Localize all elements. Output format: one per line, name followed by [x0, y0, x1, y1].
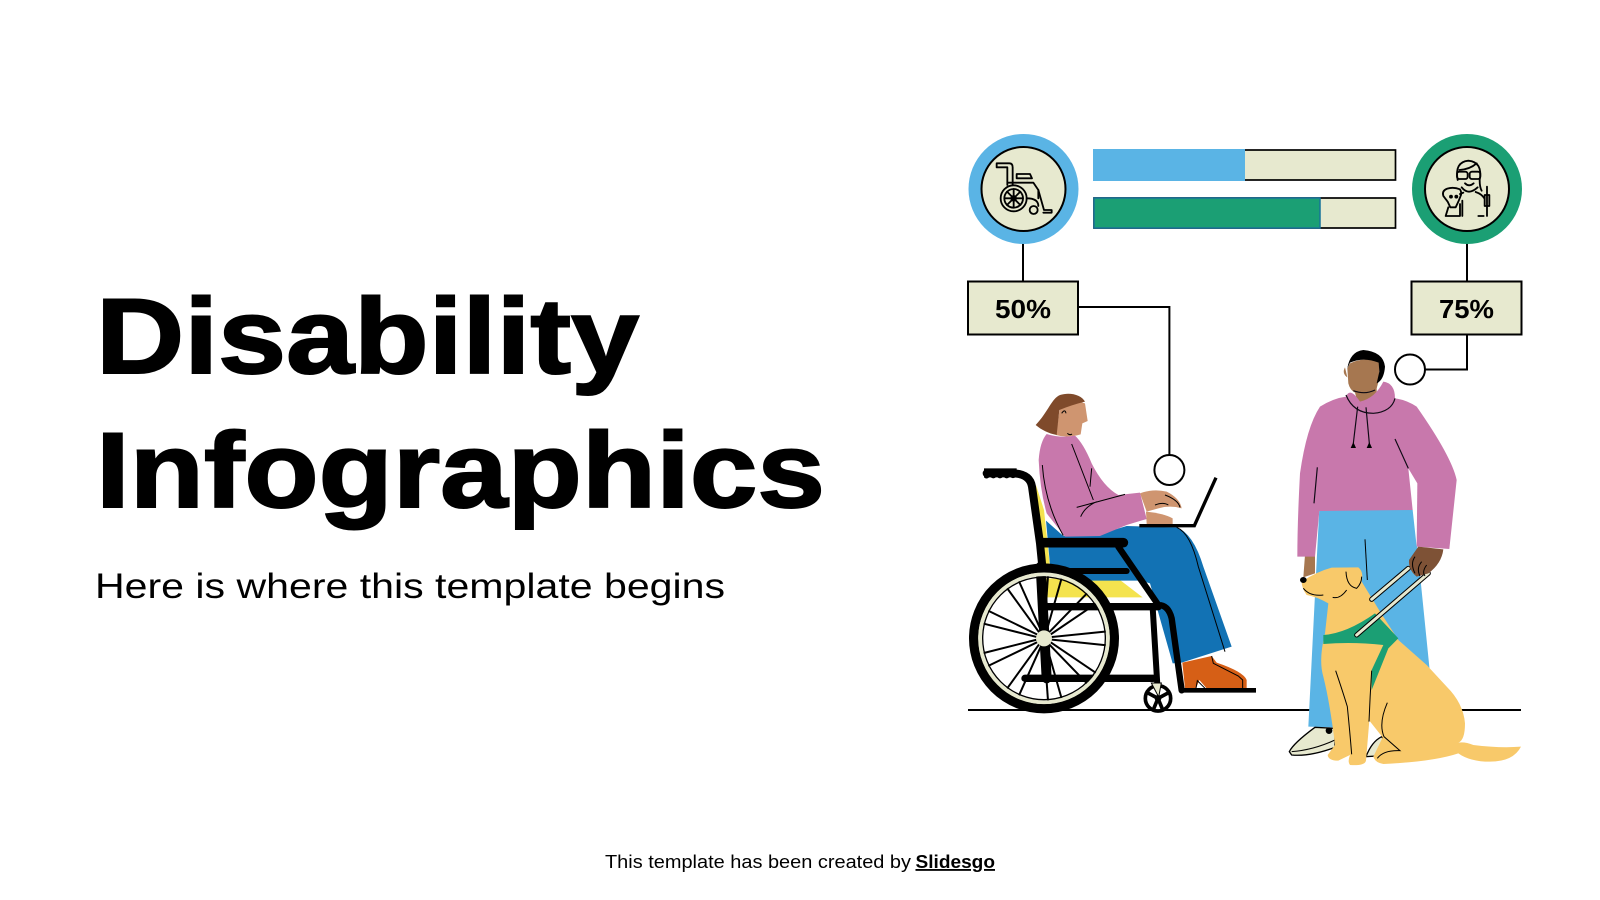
hoodie: [1297, 382, 1457, 557]
hair: [1036, 394, 1085, 435]
trousers: [1308, 508, 1430, 727]
title: Disability: [96, 276, 639, 396]
wheelchair seat cushion: [1036, 485, 1143, 597]
title: [96, 276, 825, 530]
guide handle: [1357, 568, 1428, 635]
trouser crease: [1365, 539, 1367, 580]
boot: [1182, 656, 1247, 688]
ear: [1344, 367, 1347, 377]
value box: 75%: 75%: [1439, 294, 1494, 324]
head and neck: [1347, 360, 1379, 405]
icon: woman, dog and cane: [1443, 161, 1489, 216]
sweater and hand lines: [1042, 411, 1180, 536]
armpit notch: [1408, 468, 1417, 547]
connector lines: [1023, 232, 1467, 456]
value box: 50%: [968, 282, 1078, 334]
neck and face: [1056, 401, 1088, 437]
dog details: [1303, 572, 1400, 758]
trousers: [1046, 521, 1232, 663]
right hand: [1409, 547, 1443, 577]
wheelchair frame: [984, 468, 1256, 690]
marker circle: woman: [1154, 455, 1184, 485]
hair: [1347, 350, 1385, 383]
finger lines: [1412, 557, 1427, 576]
icon: wheelchair: [997, 163, 1052, 214]
left hand: [1303, 555, 1315, 577]
value box: 75%: [1412, 282, 1522, 334]
guide dog body: [1302, 567, 1521, 765]
dog nose: [1300, 577, 1307, 583]
footer credit: This template has been created by: [605, 851, 912, 872]
ground line: [968, 709, 1521, 711]
illustration: woman in wheelchair with laptop: [974, 394, 1256, 711]
drawstring tips: [1351, 442, 1372, 448]
value box: 50%: 50%: [995, 294, 1051, 324]
hand: [1140, 490, 1182, 524]
rear wheel: [974, 568, 1114, 709]
icon badge: wheelchair: [968, 134, 1078, 244]
hoodie lines: [1314, 390, 1408, 503]
footer credit: Slidesgo: [916, 851, 995, 872]
progress bar: blue 50%: [1093, 149, 1396, 181]
icon badge: person with guide dog: [1412, 134, 1522, 244]
subtitle: Here is where this template begins: [95, 567, 725, 606]
progress bar: green 75%: [1094, 198, 1396, 228]
trouser line: [1177, 527, 1225, 652]
shoe details: [1292, 740, 1335, 752]
illustration: man with guide dog: [1289, 350, 1521, 765]
marker circle: man: [1395, 354, 1425, 384]
shoes: [1289, 727, 1393, 757]
dog harness: [1323, 613, 1398, 690]
title: Infographics: [96, 410, 825, 530]
sweater: [1039, 434, 1147, 537]
caster wheel: [1145, 683, 1171, 711]
laptop: [1139, 478, 1216, 526]
